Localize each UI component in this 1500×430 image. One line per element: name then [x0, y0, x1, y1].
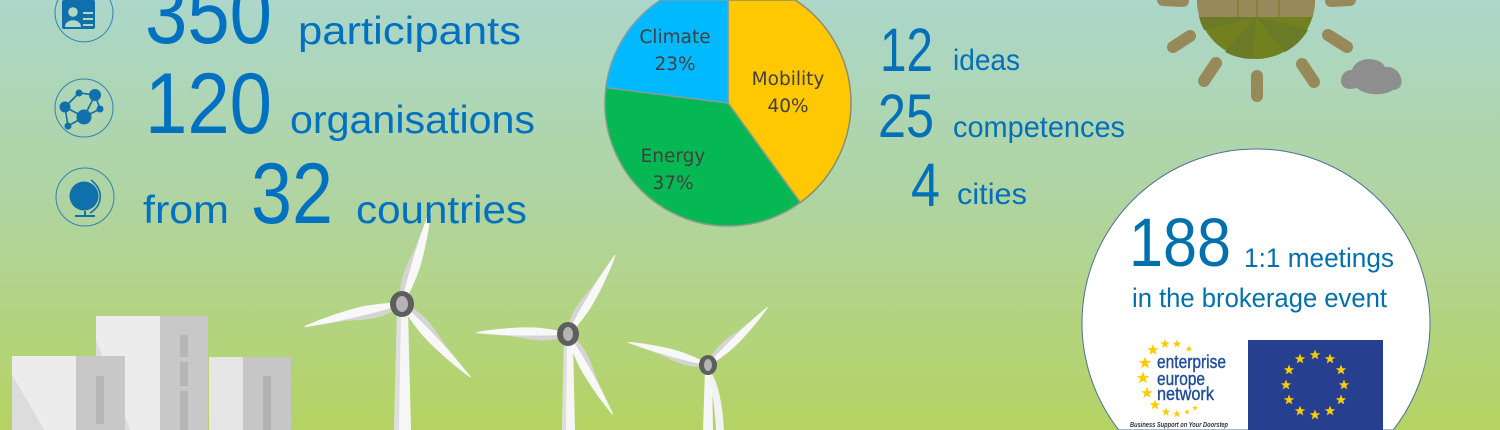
stat: organisations: 120	[145, 56, 272, 152]
icon: participant badge	[55, 0, 113, 42]
stat: cities	[911, 151, 1027, 219]
icon: wind turbine small	[626, 302, 771, 430]
stat: cities: 4	[911, 151, 940, 219]
pie chart	[605, 0, 851, 226]
icon: sun with cloud	[1163, 0, 1402, 96]
logo: enterprise europe network: europe	[1157, 369, 1205, 389]
stat: countries	[143, 146, 527, 242]
label: energy: 37%	[652, 173, 694, 194]
stat: countries: countries	[356, 189, 527, 232]
stat: participants: participants	[298, 10, 521, 53]
icon: EU flag	[1248, 340, 1383, 430]
stat: cities: cities	[957, 178, 1027, 211]
pie slice: mobility	[728, 0, 851, 202]
stat: ideas: 12	[880, 16, 933, 84]
stat: organisations	[145, 56, 535, 152]
icon: wind turbine medium	[476, 251, 620, 430]
label: mobility: 40%	[767, 96, 809, 117]
pie slice: energy	[605, 88, 800, 226]
stat: competences: 25	[878, 82, 934, 150]
label: energy: Energy	[641, 146, 705, 167]
icon: organisations network	[55, 79, 113, 137]
label: brokerage event: in the brokerage event	[1132, 283, 1387, 313]
stat: ideas	[880, 16, 1020, 84]
stat: countries: from	[143, 189, 229, 232]
label: mobility: Mobility	[752, 69, 824, 90]
logo: enterprise europe network: network	[1157, 384, 1215, 404]
stat: organisations: organisations	[290, 99, 535, 142]
stat: competences: competences	[953, 111, 1125, 144]
icon: buildings	[12, 316, 291, 430]
stat: countries: 32	[251, 146, 333, 242]
stat: ideas: ideas	[953, 44, 1020, 77]
panel: brokerage event circle	[1082, 149, 1430, 430]
logo: enterprise europe network: Business Support on Your Doorstep	[1130, 422, 1229, 429]
stat: participants	[145, 0, 521, 62]
logo: enterprise europe network	[1130, 339, 1229, 429]
icon: globe	[56, 168, 114, 226]
logo: enterprise europe network: enterprise	[1157, 352, 1226, 372]
label: 1:1 meetings: 1:1 meetings	[1244, 243, 1394, 273]
label: climate: 23%	[654, 54, 696, 75]
label: climate: Climate	[639, 27, 711, 48]
stat: competences	[878, 82, 1125, 150]
pie slice: climate	[606, 0, 728, 103]
stat: meetings: 188	[1129, 204, 1231, 281]
icon: wind turbine large	[303, 206, 476, 430]
